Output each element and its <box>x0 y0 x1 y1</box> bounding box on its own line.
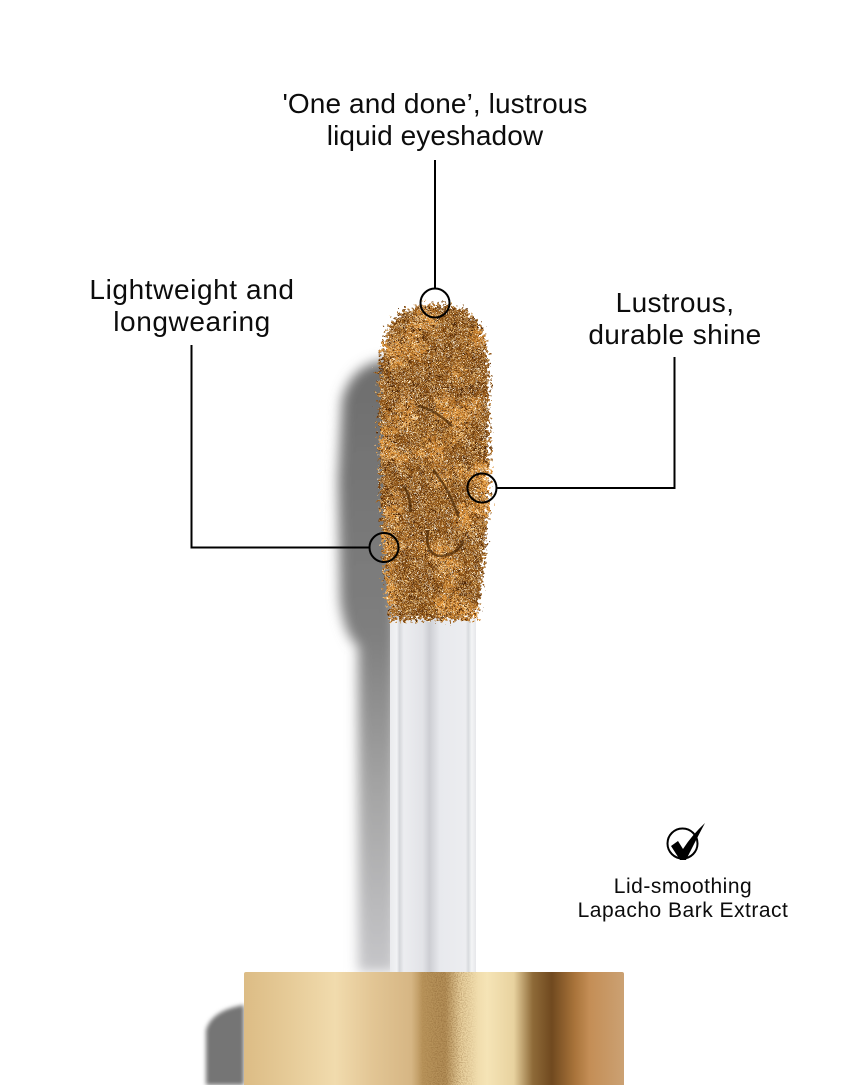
callout text: right: durable shine <box>588 319 762 350</box>
tip creases <box>404 406 463 556</box>
product illustration and callout lines <box>190 160 705 1085</box>
feature text: ingredient: Lid-smoothing <box>614 875 752 898</box>
cast shadow of cap <box>206 1005 244 1085</box>
cast shadow of applicator <box>338 360 396 972</box>
callout line: top <box>420 160 450 318</box>
gold cap <box>244 972 624 1085</box>
icon: check mark <box>668 823 705 860</box>
callout text: left <box>89 274 295 337</box>
callout line: left <box>192 345 398 562</box>
callout text: right: Lustrous, <box>616 287 734 318</box>
callout text: top <box>282 88 588 151</box>
glitter applicator tip <box>370 296 500 626</box>
callout text: top: 'One and done’, lustrous <box>282 88 588 119</box>
clear wand stem <box>390 618 476 972</box>
feature text: ingredient <box>578 875 788 922</box>
callout text: top: liquid eyeshadow <box>327 120 543 151</box>
callout text: left: longwearing <box>113 306 271 337</box>
callout text: left: Lightweight and <box>89 274 295 305</box>
callout line: right <box>468 357 674 502</box>
callout text: right <box>588 287 762 350</box>
feature text: ingredient: Lapacho Bark Extract <box>578 899 788 922</box>
